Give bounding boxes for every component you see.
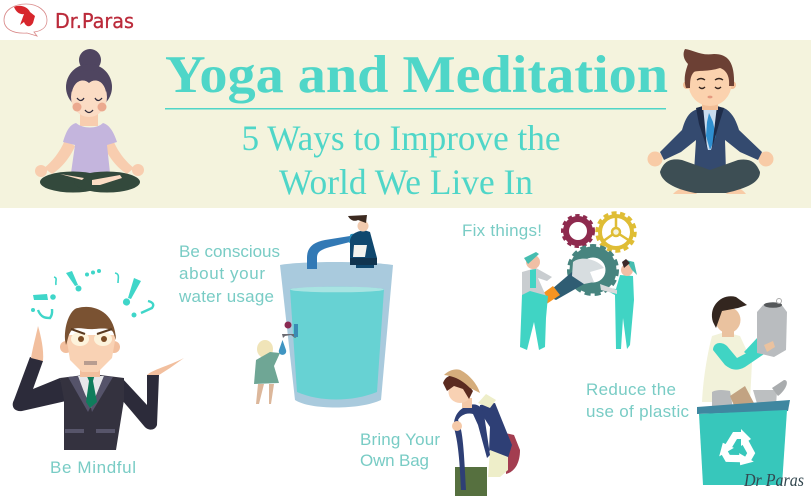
illustration: meditating woman	[35, 49, 144, 192]
caption: Reduce the use of plastic: Reduce the	[586, 380, 676, 399]
subtitle: World We Live In	[279, 162, 533, 202]
illustration: puzzled man with question marks	[13, 269, 184, 450]
caption: Bring Your Own Bag	[360, 430, 440, 470]
logo: Dr.Paras: Dr.Paras	[55, 9, 134, 33]
caption: Bring Your Own Bag: Own Bag	[360, 451, 429, 470]
caption: Bring Your Own Bag: Bring Your	[360, 430, 440, 449]
caption: Reduce the use of plastic: use of plastic	[586, 402, 690, 421]
icon: recycling symbol	[714, 429, 762, 470]
illustration: meditating businessman	[648, 49, 774, 194]
caption: water usage: about your	[179, 264, 265, 283]
illustration: person recycling cans	[697, 296, 790, 485]
banner	[0, 40, 811, 208]
caption: water usage	[178, 242, 280, 306]
illustration: workers fixing gears	[520, 213, 637, 350]
illustration: glass of water with figures	[254, 215, 393, 408]
title rule	[165, 108, 666, 110]
icon: exclamation and question marks	[31, 269, 141, 318]
caption: Reduce the use of plastic	[586, 380, 690, 421]
subtitle: 5 Ways to Improve the	[242, 118, 560, 158]
caption: Fix things!: Fix things!	[462, 221, 542, 240]
caption: water usage: Be conscious	[179, 242, 280, 261]
caption: water usage: water usage	[178, 287, 274, 306]
title: Yoga and Meditation	[165, 46, 668, 104]
caption: Be Mindful: Be Mindful	[50, 458, 136, 477]
signature: Dr. Paras: Dr Paras	[743, 470, 804, 490]
logo: Dr.Paras	[4, 4, 134, 36]
illustration: traveller with backpack	[443, 369, 520, 496]
subtitle	[242, 118, 560, 202]
